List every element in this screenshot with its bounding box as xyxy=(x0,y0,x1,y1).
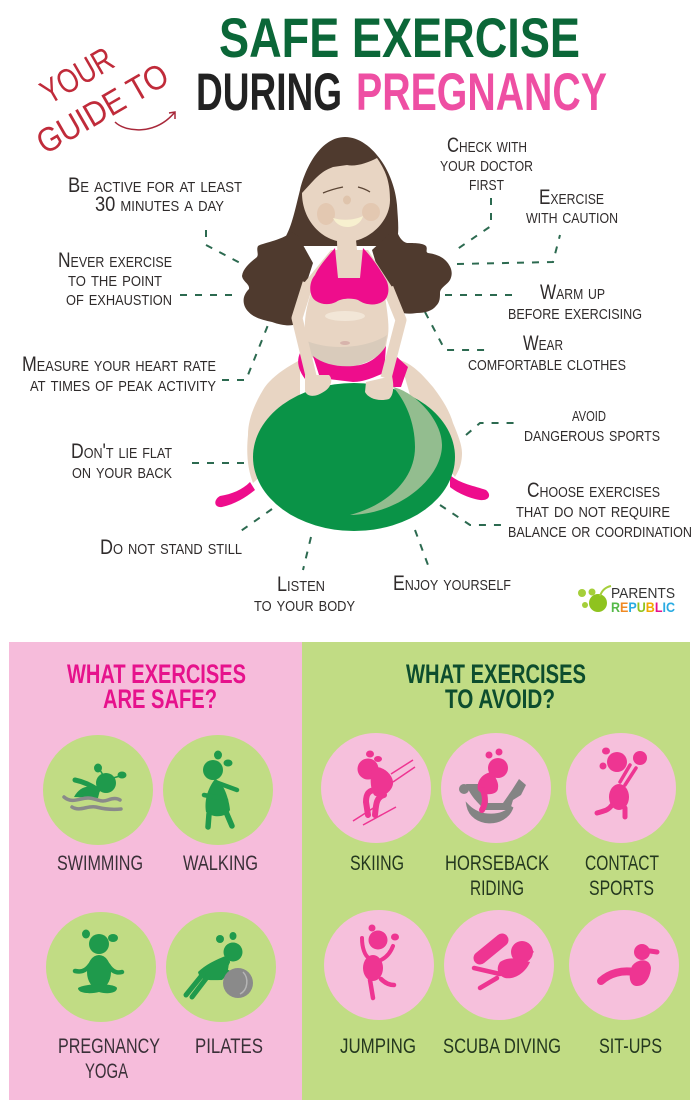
cheeks xyxy=(317,203,380,225)
navel xyxy=(340,341,350,345)
label: enjoy yourself: Enjoy yourself xyxy=(393,572,511,595)
label: contact sports xyxy=(585,852,659,900)
label: warm up xyxy=(508,281,642,324)
label: warm up: Warm up xyxy=(540,281,605,304)
label: horseback riding xyxy=(445,852,549,900)
panel: exercises to avoid xyxy=(302,642,690,1100)
title: safe exercise: SAFE EXERCISE xyxy=(219,6,580,69)
label: wear comfortable clothes: comfortable clothes xyxy=(468,352,626,375)
belly highlight xyxy=(325,311,365,321)
legs xyxy=(247,360,462,483)
your guide to tag with arrow: GUIDE TO xyxy=(30,56,175,162)
circle: sit-ups xyxy=(569,910,679,1020)
label: walking: WALKING xyxy=(183,852,258,875)
heading: what exercises to avoid: WHAT EXERCISES xyxy=(406,659,586,689)
neck xyxy=(337,240,360,278)
shoulders xyxy=(304,250,392,300)
logo: parents republic xyxy=(578,585,675,615)
label: horseback riding: HORSEBACK xyxy=(445,852,549,875)
hair: left curls xyxy=(242,232,313,325)
circle: skiing xyxy=(321,733,431,843)
label: check with your doctor: your doctor xyxy=(440,153,533,176)
label: don't lie flat xyxy=(71,440,172,483)
label: never exercise xyxy=(58,249,172,310)
label: sit-ups: SIT-UPS xyxy=(599,1035,662,1058)
belly xyxy=(305,290,388,363)
circle: scuba diving xyxy=(444,910,554,1020)
label: contact sports: CONTACT xyxy=(585,852,659,875)
ball xyxy=(253,383,455,531)
feet xyxy=(215,475,489,507)
label: scuba diving: SCUBA DIVING xyxy=(443,1035,561,1058)
circle: yoga xyxy=(46,912,156,1022)
dashed connector lines xyxy=(180,198,560,570)
heading: what exercises are safe: ARE SAFE? xyxy=(103,684,217,714)
label: listen to your body: Listen xyxy=(277,573,325,596)
circle: pilates xyxy=(166,912,276,1022)
circle: swimming xyxy=(43,735,153,845)
label: measure heart rate: at times of peak activity xyxy=(30,373,216,396)
panel: safe exercises xyxy=(9,642,302,1100)
label: check with your doctor: Check with xyxy=(447,134,527,157)
label: exercise with caution: with caution xyxy=(526,205,618,228)
arms xyxy=(297,283,401,400)
title: during pregnancy xyxy=(196,63,607,122)
shorts xyxy=(313,346,386,382)
label: choose exercises: that do not require xyxy=(516,499,670,522)
hair dome xyxy=(286,137,398,246)
label: exercise with caution: Exercise xyxy=(539,186,604,209)
label: don't lie flat: Don't lie flat xyxy=(71,440,172,463)
label: never exercise: Never exercise xyxy=(58,249,172,272)
label: choose exercises xyxy=(508,479,692,542)
label: listen to your body: to your body xyxy=(254,593,355,616)
label: listen to your body xyxy=(254,573,355,616)
illustration: pregnant woman on exercise ball xyxy=(215,137,489,531)
bikini top xyxy=(310,248,388,304)
label: avoid dangerous sports: avoid xyxy=(572,403,606,426)
label: swimming: SWIMMING xyxy=(57,852,143,875)
label: pregnancy yoga: PREGNANCY xyxy=(58,1035,160,1058)
circle: contact sports xyxy=(566,733,676,843)
label: avoid dangerous sports: dangerous sports xyxy=(524,423,660,446)
label: wear comfortable clothes xyxy=(468,332,626,375)
label: check with your doctor xyxy=(440,134,533,195)
label: exercise with caution xyxy=(526,186,618,228)
label: choose exercises: Choose exercises xyxy=(527,479,660,502)
label: be active: Be active for at least xyxy=(68,174,242,197)
label: check with your doctor: first xyxy=(469,172,504,195)
logo: parents republic: REPUBLIC xyxy=(611,599,675,615)
label: do not stand still: Do not stand still xyxy=(100,536,242,559)
title: during pregnancy: DURING xyxy=(196,63,342,122)
label: pilates: PILATES xyxy=(195,1035,263,1058)
label: contact sports: SPORTS xyxy=(589,877,654,900)
hair: right curls xyxy=(372,228,452,314)
label: avoid dangerous sports xyxy=(524,403,660,446)
label: don't lie flat: on your back xyxy=(72,460,172,483)
label: never exercise: of exhaustion xyxy=(66,287,172,310)
shorts side pieces xyxy=(298,353,408,387)
label: never exercise: to the point xyxy=(68,268,162,291)
heading: what exercises are safe xyxy=(67,659,246,714)
label: horseback riding: RIDING xyxy=(470,877,524,900)
label: jumping: JUMPING xyxy=(340,1035,416,1058)
eyes and nose xyxy=(323,187,370,193)
label: be active xyxy=(68,174,242,216)
smile xyxy=(333,216,363,227)
your guide to tag with arrow: YOUR xyxy=(34,40,121,112)
logo: parents republic: PARENTS xyxy=(611,585,675,602)
label: pregnancy yoga: YOGA xyxy=(85,1060,128,1083)
heading: what exercises to avoid: TO AVOID? xyxy=(445,684,555,714)
label: be active: 30 minutes a day xyxy=(95,193,224,216)
label: measure heart rate: Measure your heart rate xyxy=(22,353,216,376)
label: warm up: before exercising xyxy=(508,301,642,324)
lower belly shade xyxy=(305,335,387,367)
label: pregnancy yoga xyxy=(58,1035,160,1083)
ball highlight xyxy=(350,387,442,515)
heading: what exercises to avoid xyxy=(406,659,586,714)
heading: what exercises are safe: WHAT EXERCISES xyxy=(67,659,246,689)
circle: horseback riding xyxy=(441,733,551,843)
circle: jumping xyxy=(324,910,434,1020)
label: wear comfortable clothes: Wear xyxy=(523,332,563,355)
title: during pregnancy: PREGNANCY xyxy=(356,63,607,122)
label: skiing: SKIING xyxy=(350,852,404,875)
label: measure heart rate xyxy=(22,353,216,396)
circle: walking xyxy=(163,735,273,845)
face xyxy=(302,158,390,242)
